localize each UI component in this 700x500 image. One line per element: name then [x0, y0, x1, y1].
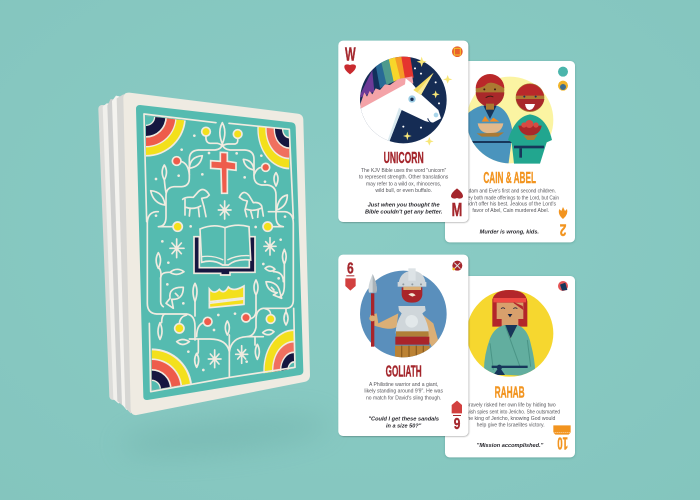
description — [461, 403, 560, 429]
title: Goliath: GOLIATH — [386, 364, 422, 381]
description: They both made offerings to the Lord, but Cain — [462, 195, 559, 201]
suit icons — [558, 67, 568, 91]
card value W and heart — [344, 43, 356, 74]
title: Unicorn: UNICORN — [384, 150, 424, 167]
description: to represent strength. Other translations — [359, 175, 448, 181]
rotated value and heart: M — [452, 199, 462, 220]
description: wild bull, or even buffalo. — [374, 188, 432, 194]
card: Goliath — [338, 255, 468, 436]
description: didn't offer his best. Jealous of the Lord's — [465, 202, 556, 208]
card value 6 and shield — [345, 261, 356, 291]
suit value — [553, 425, 571, 454]
card: Unicorn — [338, 41, 468, 222]
small stars and dots — [155, 134, 286, 371]
description: The KJV Bible uses the word "unicorn" — [361, 168, 446, 174]
description: Adam and Eve's first and second children. — [465, 189, 556, 195]
crown — [209, 286, 244, 308]
description: may refer to a wild ox, rhinoceros, — [366, 182, 442, 188]
description: Jewish spies sent into Jericho. She outsmarted — [461, 409, 560, 415]
title: Rahab: RAHAB — [495, 385, 525, 402]
suit icon — [558, 281, 568, 291]
rotated value and shield — [452, 401, 462, 431]
playing card deck — [98, 92, 310, 416]
berries — [172, 127, 275, 333]
suit value: 2 — [560, 220, 566, 239]
rotated value and shield: 6 — [454, 414, 460, 431]
description: help give the Israelites victory. — [477, 423, 545, 429]
card: Cain and Abel — [445, 61, 575, 242]
quote — [365, 203, 443, 215]
top card — [123, 93, 310, 415]
quote: "Mission accomplished." — [477, 443, 544, 449]
suit value — [559, 207, 567, 239]
description: the king of Jericho, knowing God would — [466, 416, 555, 422]
quote: Murder is wrong, kids. — [480, 230, 539, 236]
description: no match for David's sling though. — [366, 395, 442, 401]
stacked card edges — [98, 94, 157, 413]
card: Rahab — [445, 276, 575, 457]
description: Bravely risked her own life by hiding two — [466, 403, 556, 409]
description: likely standing around 9'9". He was — [364, 389, 443, 395]
illustration: Goliath — [360, 268, 447, 362]
quote: Bible couldn't get any better. — [365, 209, 443, 215]
suit icon — [452, 46, 463, 57]
illustration: Cain and Abel — [460, 74, 553, 165]
description: A Philistine warrior and a giant, — [369, 382, 439, 388]
snowflake stars — [170, 201, 276, 368]
quote: in a size 50?" — [386, 423, 422, 429]
card deck scene — [98, 40, 576, 460]
open book — [194, 225, 255, 275]
quote: "Could I get these sandals — [368, 417, 439, 423]
illustration: unicorn — [355, 55, 452, 148]
quote — [368, 417, 439, 429]
cross — [211, 152, 236, 193]
deck shadow — [119, 408, 331, 462]
teal card panel — [136, 105, 303, 400]
card value 6 and shield: 6 — [347, 261, 354, 278]
lower vine line art — [147, 212, 295, 392]
quote: Just when you thought the — [368, 203, 440, 209]
description: favor of Abel, Cain murdered Abel. — [472, 208, 549, 214]
lambs — [183, 189, 263, 218]
suit icon — [452, 261, 462, 271]
card value W and heart: W — [345, 43, 356, 64]
title: Cain & Abel: CAIN & ABEL — [483, 170, 536, 187]
description — [359, 168, 448, 194]
illustration: Rahab — [467, 290, 553, 377]
upper vine line art — [144, 114, 293, 227]
description — [364, 382, 443, 401]
rotated value and heart — [451, 188, 463, 220]
corner rainbows — [98, 92, 310, 416]
suit value: 10 — [557, 434, 568, 454]
description — [462, 189, 559, 214]
